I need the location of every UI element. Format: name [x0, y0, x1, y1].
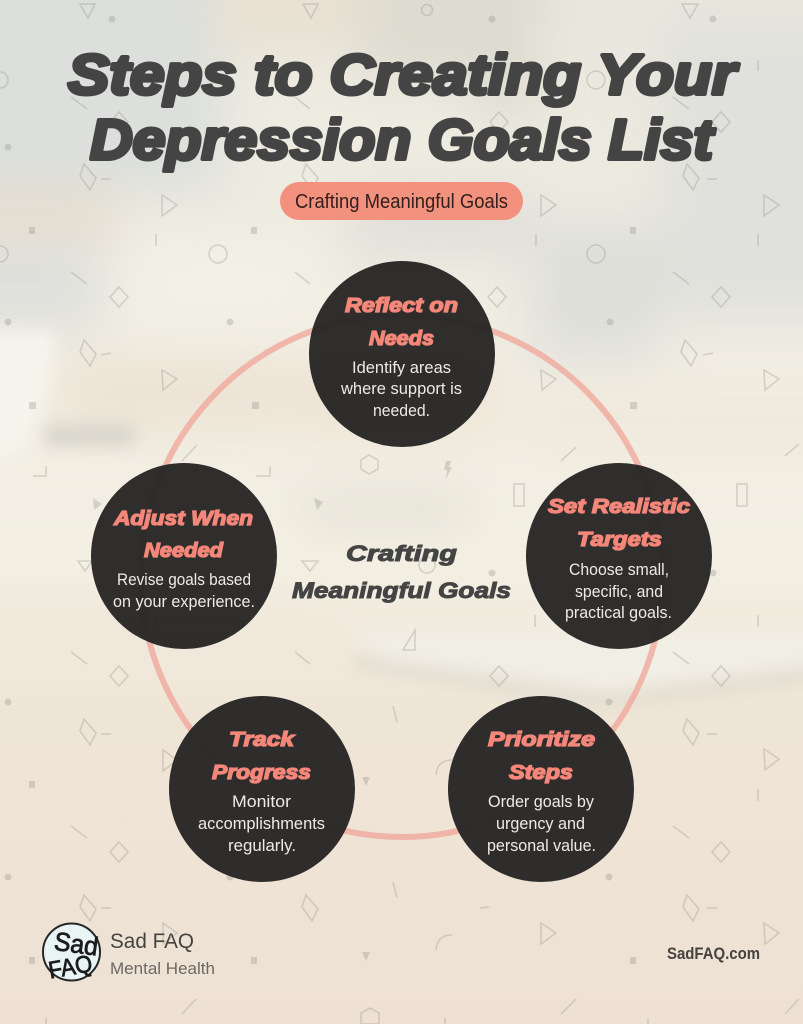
step 4: track progress: regularly. — [228, 837, 296, 855]
step 2: set realistic targets: specific, and — [575, 583, 663, 601]
centre label: Crafting — [346, 541, 458, 566]
step 5: adjust when needed: Revise goals based — [117, 571, 251, 589]
subtitle pill — [280, 182, 523, 220]
centre label: Meaningful Goals — [292, 578, 511, 603]
logo badge — [43, 924, 100, 985]
step 3: prioritize steps: personal value. — [487, 837, 596, 855]
step 3: prioritize steps: Steps — [509, 762, 573, 784]
centre label — [292, 541, 511, 603]
brand name: Mental Health — [110, 960, 215, 978]
step 1: reflect on needs: Identify areas — [352, 359, 451, 377]
brand name — [110, 930, 215, 978]
step 4: track progress — [169, 696, 355, 882]
brand name: Sad FAQ — [110, 930, 194, 953]
step 1: reflect on needs — [309, 261, 495, 447]
step 4: track progress: Monitor — [232, 793, 292, 811]
website: SadFAQ.com — [667, 945, 760, 963]
step 4: track progress: accomplishments — [198, 815, 325, 833]
step 5: adjust when needed: Needed — [144, 540, 224, 562]
step 4: track progress: Track — [229, 729, 295, 751]
step 2: set realistic targets: Choose small, — [569, 561, 669, 579]
logo badge: Sad — [52, 926, 100, 962]
step 3: prioritize steps — [448, 696, 634, 882]
title: Depression Goals List — [90, 108, 715, 172]
title — [68, 43, 739, 172]
step 5: adjust when needed: Adjust When — [113, 508, 253, 530]
step 2: set realistic targets: Set Realistic — [548, 496, 690, 518]
step 3: prioritize steps: Order goals by — [488, 793, 595, 811]
logo badge: FAQ — [46, 950, 94, 985]
step 2: set realistic targets — [526, 463, 712, 649]
title: Steps to Creating Your — [68, 43, 739, 107]
step 2: set realistic targets: Targets — [577, 529, 662, 551]
step 1: reflect on needs: Reflect on — [345, 295, 458, 317]
step 4: track progress: Progress — [212, 762, 311, 784]
step 1: reflect on needs: where support is — [340, 380, 462, 398]
step 3: prioritize steps: Prioritize — [488, 729, 595, 751]
subtitle pill: Crafting Meaningful Goals — [295, 191, 508, 213]
step 5: adjust when needed: on your experience. — [113, 593, 255, 611]
step 1: reflect on needs: needed. — [373, 402, 430, 420]
step 5: adjust when needed — [91, 463, 277, 649]
step 1: reflect on needs: Needs — [369, 328, 434, 350]
step 2: set realistic targets: practical goals. — [565, 604, 672, 622]
connecting ring — [141, 315, 663, 837]
step 3: prioritize steps: urgency and — [496, 815, 585, 833]
